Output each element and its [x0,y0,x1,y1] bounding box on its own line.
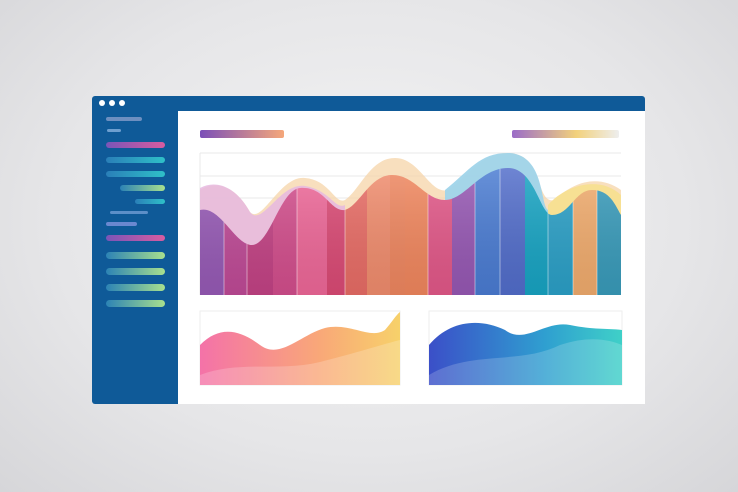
main chart [200,150,621,295]
sidebar menu [106,117,165,307]
bottom left area chart [200,311,400,385]
header bars [200,130,619,138]
dashboard window illustration [92,96,645,404]
bottom right area chart [429,311,622,385]
window frame [92,96,645,404]
window control dots [99,100,125,106]
